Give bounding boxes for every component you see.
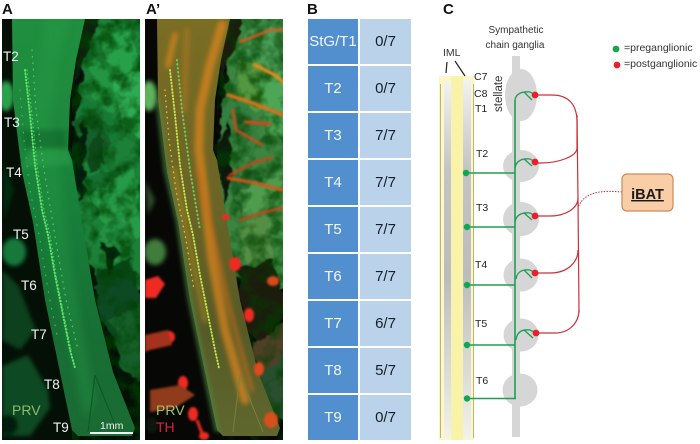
PRV label on panel A: PRV <box>12 402 41 418</box>
panel: B table of segments: StG/T1 <box>309 33 357 50</box>
heading: sympathetic chain ganglia second line: chain ganglia <box>486 40 545 51</box>
segment labels: T5 <box>475 318 487 330</box>
panel: C schematic <box>439 25 697 440</box>
segment labels on panel A: T4 <box>6 165 22 180</box>
segment labels on panel A: T7 <box>31 327 47 342</box>
panel: B table of segments: 7/7 <box>375 127 396 144</box>
merged neuron column <box>165 60 219 368</box>
scale bar: 1mm <box>100 420 124 432</box>
IML label with pointers: IML <box>443 47 461 59</box>
IML label with pointers <box>443 47 465 76</box>
PRV and TH legend on panel A' <box>156 402 185 435</box>
panel: B table of segments: 0/7 <box>375 80 396 97</box>
postganglionic red fibres <box>535 95 579 333</box>
segment labels on panel A: T5 <box>13 227 29 242</box>
panel: B table of segments: 6/7 <box>375 315 396 332</box>
postganglionic neuron dots <box>532 92 539 336</box>
panel: B table of segments: 7/7 <box>375 268 396 285</box>
segment labels on panel A <box>3 49 69 435</box>
panel: A PRV micrograph <box>0 10 150 440</box>
PRV and TH legend on panel A': TH <box>156 419 175 435</box>
segment labels on panel A: T9 <box>53 420 69 435</box>
panel label A: A <box>2 1 13 18</box>
panel: B table of segments: T3 <box>324 127 342 144</box>
red ganglion cell clusters <box>145 214 279 440</box>
preganglionic neuron dots <box>463 170 470 402</box>
heading: sympathetic chain ganglia: Sympathetic <box>488 25 544 36</box>
legend: =postganglionic <box>624 58 697 70</box>
segment labels: T6 <box>476 375 488 387</box>
panel: B table of segments: T7 <box>324 315 342 332</box>
merged tissue texture <box>217 19 283 440</box>
iBAT box: iBAT <box>631 187 664 203</box>
segment labels on panel A: T6 <box>21 278 37 293</box>
merged spinal cord <box>157 19 280 436</box>
PRV and TH legend on panel A': PRV <box>156 402 185 418</box>
panel: B table of segments: T5 <box>324 221 342 238</box>
segment labels <box>474 71 488 387</box>
orange streaks <box>158 25 252 430</box>
dotted connection to iBAT <box>578 191 622 207</box>
segment labels: C7 <box>474 71 488 83</box>
panel: B table of segments: T9 <box>324 409 342 426</box>
segment labels: C8 <box>474 88 488 100</box>
merged right tissue folds <box>215 10 290 420</box>
spinal cord <box>12 19 135 436</box>
segment labels: T4 <box>475 259 487 271</box>
red nerve bundles <box>228 30 283 220</box>
panel: B table of segments <box>308 19 411 440</box>
segment labels on panel A: T8 <box>44 377 60 392</box>
panel: B table of segments: T6 <box>324 268 342 285</box>
panel: B table of segments: 0/7 <box>375 33 396 50</box>
spinal cord column <box>439 76 474 440</box>
panel: B table of segments: 5/7 <box>375 362 396 379</box>
segment labels: T1 <box>475 103 487 115</box>
segment labels: T2 <box>476 148 488 160</box>
panel label C: C <box>443 1 454 18</box>
scale bar <box>90 420 133 434</box>
panel: B table of segments: 7/7 <box>375 174 396 191</box>
iBAT box <box>622 174 673 211</box>
panel: B table of segments: T8 <box>324 362 342 379</box>
segment labels: T3 <box>476 202 488 214</box>
panel: A' merged PRV and TH micrograph <box>141 10 290 440</box>
stellate label: stellate <box>493 76 505 112</box>
panel label A': A’ <box>146 1 160 18</box>
legend <box>613 42 697 70</box>
segment labels on panel A: T2 <box>3 49 19 64</box>
right tissue texture <box>72 19 140 440</box>
right tissue folds <box>68 19 140 382</box>
sympathetic chain and ganglia <box>502 56 539 437</box>
legend: =preganglionic <box>624 42 693 54</box>
panel: B table of segments: 0/7 <box>375 409 396 426</box>
segment labels on panel A: T3 <box>4 115 20 130</box>
left tissue patches <box>0 81 50 436</box>
panel: B table of segments: T4 <box>324 174 342 191</box>
labelled neuron column <box>20 50 78 368</box>
panel label B: B <box>307 1 318 18</box>
merged left tissue patches <box>141 81 166 433</box>
panel: B table of segments: T2 <box>324 80 342 97</box>
preganglionic green fibres <box>466 92 536 399</box>
panel: B table of segments: 7/7 <box>375 221 396 238</box>
